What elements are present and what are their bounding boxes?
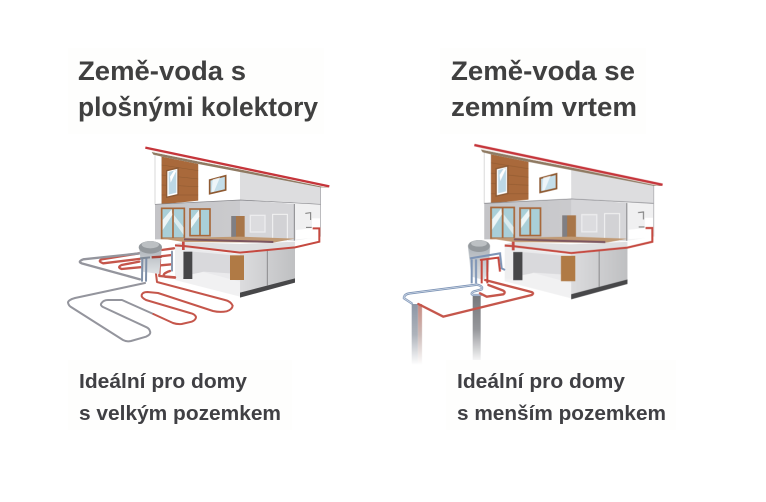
outdoor unit: [139, 241, 162, 282]
caption: ideální pro domy s velkým pozemkem: Ideální pro domy: [79, 371, 248, 393]
caption: ideální pro domy s menším pozemkem: s menším pozemkem: [457, 403, 666, 425]
panel: plošné kolektory: [68, 48, 329, 430]
title: Země-voda s plošnými kolektory: plošnými kolektory: [78, 92, 318, 122]
title: Země-voda se zemním vrtem: [440, 48, 646, 134]
title: Země-voda s plošnými kolektory: [68, 48, 324, 134]
boreholes: [412, 295, 481, 365]
borehole pipes: [404, 280, 533, 317]
title: Země-voda s plošnými kolektory: Země-voda s: [78, 56, 246, 86]
caption: ideální pro domy s menším pozemkem: Ideální pro domy: [457, 371, 626, 393]
illustration: house with ground collectors: [68, 148, 329, 341]
illustration: house with borehole: [404, 145, 663, 365]
caption: ideální pro domy s velkým pozemkem: s velkým pozemkem: [79, 403, 281, 425]
panel: zemní vrt: [404, 48, 676, 430]
house: [474, 145, 663, 299]
title: Země-voda se zemním vrtem: zemním vrtem: [451, 92, 637, 122]
title: Země-voda se zemním vrtem: Země-voda se: [451, 56, 635, 86]
outdoor unit: [468, 240, 505, 283]
caption: ideální pro domy s velkým pozemkem: [68, 360, 292, 430]
caption: ideální pro domy s menším pozemkem: [446, 360, 676, 430]
house: [145, 148, 329, 298]
ground collector pipes: [68, 248, 233, 341]
